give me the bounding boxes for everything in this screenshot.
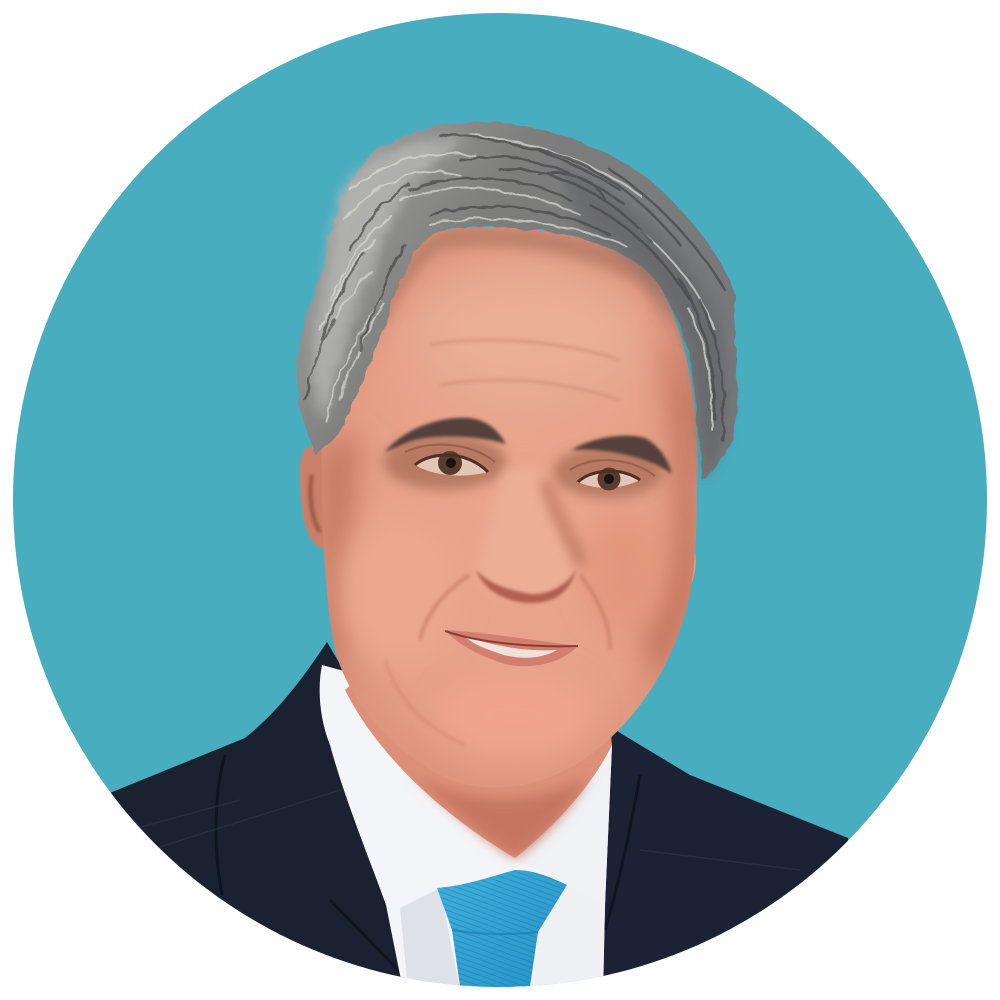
right eye socket bbox=[553, 446, 663, 498]
right eye bbox=[570, 460, 655, 490]
mouth bbox=[445, 630, 578, 666]
neck bbox=[345, 686, 612, 865]
face bbox=[322, 227, 698, 787]
left eye bbox=[405, 445, 495, 476]
left ear bbox=[300, 446, 324, 548]
right edge shadow bbox=[640, 320, 700, 690]
grey hair bbox=[297, 122, 737, 482]
white shirt and collar bbox=[320, 665, 612, 1000]
left eyebrow bbox=[385, 418, 506, 452]
hair strands bbox=[305, 135, 725, 440]
hair shadow on forehead bbox=[384, 227, 672, 328]
forehead highlight bbox=[410, 270, 650, 400]
cheek warmth bbox=[330, 532, 381, 650]
smile lines bbox=[385, 575, 610, 745]
suit jacket bbox=[100, 642, 860, 1000]
nose bbox=[476, 470, 582, 603]
hair shadows bbox=[560, 165, 728, 480]
right ear bbox=[692, 552, 696, 584]
figure bbox=[100, 122, 860, 1000]
right eyebrow bbox=[572, 436, 672, 474]
left eye socket bbox=[383, 434, 507, 490]
chin highlight bbox=[457, 689, 577, 749]
blue tie bbox=[437, 870, 567, 1000]
forehead creases bbox=[430, 340, 620, 400]
left edge shadow bbox=[320, 430, 360, 680]
